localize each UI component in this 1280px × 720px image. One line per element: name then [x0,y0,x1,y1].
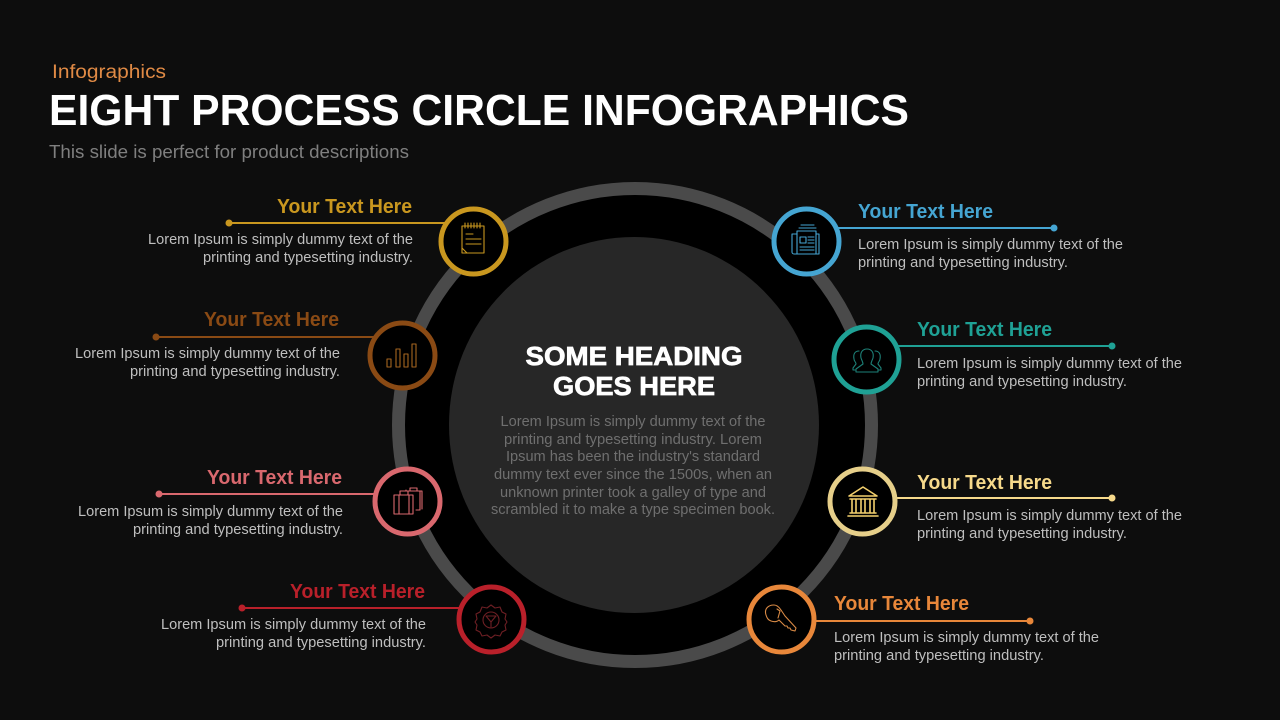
connector [895,342,1116,350]
step description: printing and typesetting industry. [203,250,413,266]
connector [238,604,463,612]
icon: bar chart [387,344,416,367]
outer ring [398,188,872,662]
step description: Lorem Ipsum is simply dummy text of the [161,617,426,633]
connector [226,220,445,226]
center heading: SOME HEADING [526,343,742,371]
step description: printing and typesetting industry. [858,255,1068,271]
step description: printing and typesetting industry. [216,635,426,651]
badge [749,587,814,652]
center heading: GOES HERE [553,373,715,401]
step description: Lorem Ipsum is simply dummy text of the [834,630,1099,646]
step description [78,504,343,538]
subtitle: This slide is perfect for product descriptions [49,141,409,162]
step description: printing and typesetting industry. [834,648,1044,664]
step 5: blue, newspaper [774,201,1123,274]
connector [892,494,1116,502]
icon: key [765,605,796,631]
step description: Lorem Ipsum is simply dummy text of the [75,346,340,362]
step heading: Your Text Here [277,196,412,218]
step 3: pink, luggage [78,467,440,538]
step description: printing and typesetting industry. [133,522,343,538]
step description: Lorem Ipsum is simply dummy text of the [917,356,1182,372]
connector [156,490,380,498]
center paragraph: dummy text ever since the 1500s, when an [494,467,772,483]
step heading: Your Text Here [917,319,1052,341]
connector [152,334,374,340]
step description [834,630,1099,664]
connector [812,618,1034,624]
center paragraph: Lorem Ipsum is simply dummy text of the [500,414,766,430]
step description: Lorem Ipsum is simply dummy text of the [148,232,413,248]
eyebrow label: Infographics [52,62,166,83]
icon: newspaper [792,225,819,254]
badge [441,209,506,274]
icon: bank [848,487,878,516]
badge [375,469,440,534]
central circle diagram [398,188,872,662]
step heading: Your Text Here [917,472,1052,494]
icon: notepad [462,223,484,253]
step description: Lorem Ipsum is simply dummy text of the [858,237,1123,253]
step heading: Your Text Here [207,467,342,489]
icon: people [853,349,881,372]
step heading: Your Text Here [858,201,993,223]
step 8: orange, key [749,587,1099,664]
step description: printing and typesetting industry. [917,526,1127,542]
step description: printing and typesetting industry. [130,364,340,380]
inner disc [449,237,819,613]
step description: printing and typesetting industry. [917,374,1127,390]
step heading: Your Text Here [290,581,425,603]
center paragraph [491,414,775,518]
step 7: cream, bank [830,469,1182,542]
title: EIGHT PROCESS CIRCLE INFOGRAPHICS [49,87,909,135]
badge [830,469,895,534]
step heading: Your Text Here [834,593,969,615]
badge [370,323,435,388]
center paragraph: unknown printer took a galley of type and [500,485,766,501]
step description [75,346,340,380]
center paragraph: Ipsum has been the industry's standard [506,449,760,465]
icon: luggage [394,488,422,514]
badge [774,209,839,274]
step 1: gold, notepad [148,196,506,274]
center heading [526,343,742,401]
step 2: brown, bar chart [75,309,435,388]
step 4: red, gear [161,581,524,652]
step description [148,232,413,266]
step description [917,508,1182,542]
step 6: teal, people [834,319,1182,392]
step heading: Your Text Here [204,309,339,331]
center paragraph: scrambled it to make a type specimen book. [491,502,775,518]
step description: Lorem Ipsum is simply dummy text of the [917,508,1182,524]
step description [917,356,1182,390]
center paragraph: printing and typesetting industry. Lorem [504,432,762,448]
badge [459,587,524,652]
step description [858,237,1123,271]
badge [834,327,899,392]
step description: Lorem Ipsum is simply dummy text of the [78,504,343,520]
connector [835,224,1058,232]
step description [161,617,426,651]
icon: gear [475,605,507,638]
